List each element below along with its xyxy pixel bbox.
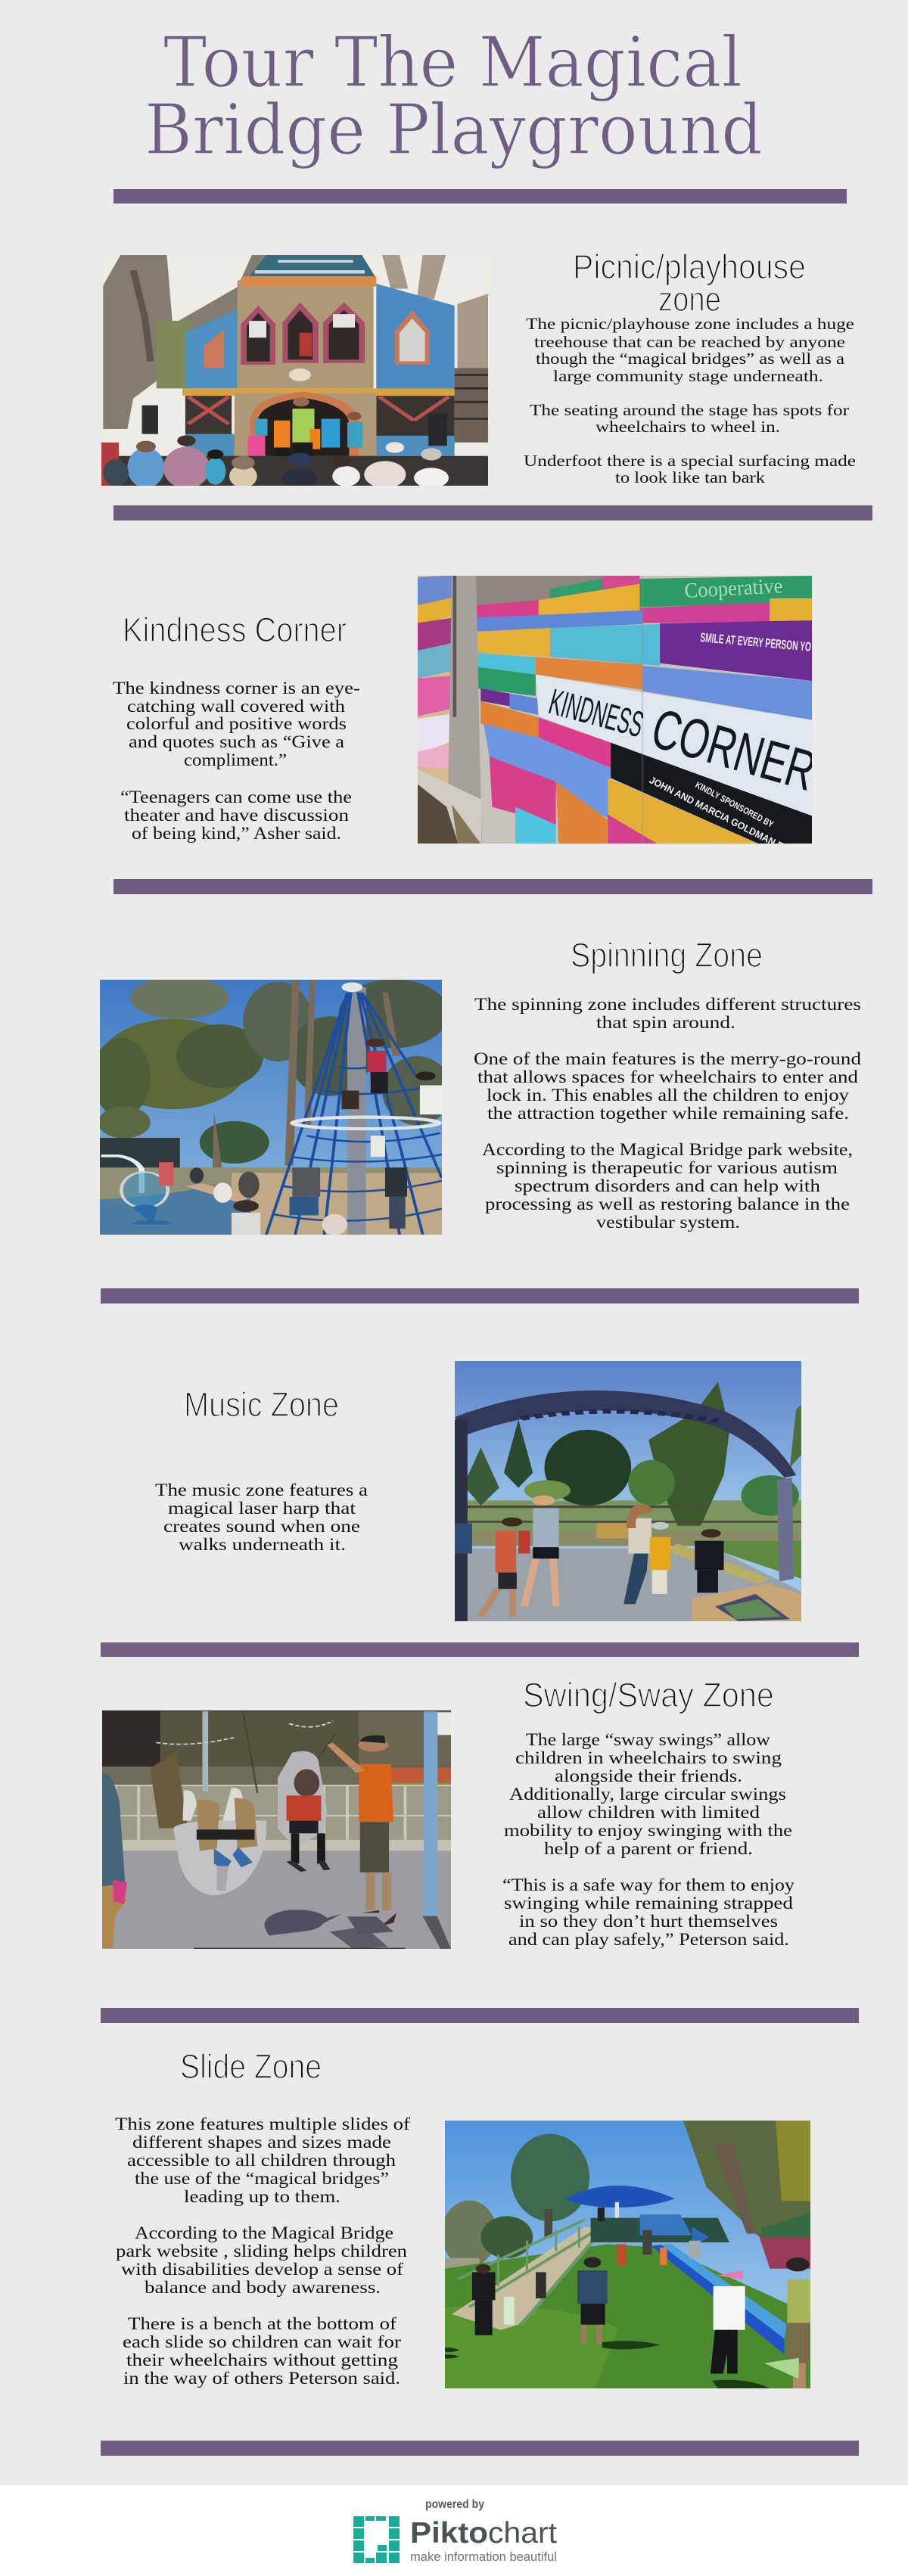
title: Tour The Magical xyxy=(163,22,742,103)
heading: slide zone: Slide Zone xyxy=(180,2047,322,2086)
text: picnic description xyxy=(524,315,856,486)
heading: picnic/playhouse zone xyxy=(573,247,806,319)
text: swing description: “This is a safe way for them to enjoy xyxy=(502,1875,795,1894)
text: slide description: different shapes and sizes made xyxy=(132,2133,391,2152)
heading: music zone: Music Zone xyxy=(184,1385,339,1424)
panel: picnic/playhouse zone xyxy=(101,247,856,489)
text: picnic description: to look like tan bark xyxy=(615,468,765,486)
text: swing description xyxy=(502,1730,795,1949)
text: slide description: each slide so children can wait for xyxy=(123,2332,401,2351)
audience xyxy=(101,435,488,489)
divider bar under title xyxy=(114,189,847,204)
heading: picnic/playhouse zone: zone xyxy=(658,280,721,319)
text: kindness description: and quotes such as “Give a xyxy=(129,732,344,751)
text: picnic description: treehouse that can be reached by anyone xyxy=(534,333,845,351)
divider bar xyxy=(114,505,872,520)
wall sign text: SMILE AT EVERY PERSON YO xyxy=(700,630,812,654)
text: swing description: mobility to enjoy swinging with the xyxy=(504,1821,792,1840)
wordmark: piktochart: chart xyxy=(488,2517,557,2550)
text: slide description: in the way of others Peterson said. xyxy=(123,2369,400,2388)
text: picnic description: The picnic/playhouse zone includes a huge xyxy=(526,315,854,333)
text: spinning description: processing as well as restoring balance in the xyxy=(485,1195,850,1213)
performers xyxy=(248,397,362,468)
text: picnic description: The seating around the stage has spots for xyxy=(530,401,849,419)
panel: music zone xyxy=(155,1361,802,1621)
text: kindness description xyxy=(113,679,360,843)
text: kindness description: compliment.” xyxy=(184,750,287,769)
text: spinning description: One of the main features is the merry-go-round xyxy=(474,1049,862,1068)
text: kindness description: colorful and positive words xyxy=(126,714,347,733)
tagline: make information beautiful xyxy=(410,2550,557,2564)
text: music description: magical laser harp that xyxy=(168,1499,356,1518)
photo: kindness wall xyxy=(418,576,812,844)
text: music description: creates sound when one xyxy=(163,1517,360,1536)
blue slide xyxy=(651,2244,785,2354)
title xyxy=(145,22,763,170)
text: slide description: balance and body awareness. xyxy=(145,2278,381,2297)
text: spinning description: spectrum disorders and can help with xyxy=(515,1176,821,1195)
text: slide description: According to the Magical Bridge xyxy=(135,2223,393,2242)
title: Bridge Playground xyxy=(145,89,763,170)
panel: kindness corner xyxy=(113,574,822,858)
text: slide description: their wheelchairs without getting xyxy=(126,2351,399,2369)
text: slide description: with disabilities develop a sense of xyxy=(121,2260,403,2279)
text: spinning description: The spinning zone includes different structures xyxy=(474,995,861,1014)
wall sign text: JOHN AND MARCIA GOLDMAN FOU xyxy=(648,774,798,858)
text: swing description: help of a parent or friend. xyxy=(544,1839,753,1858)
blue canopy xyxy=(564,2186,674,2226)
divider bar xyxy=(101,1288,859,1304)
heading: kindness corner: Kindness Corner xyxy=(123,611,347,649)
wordmark: piktochart: Pikto xyxy=(410,2517,488,2550)
text: swing description: children in wheelchairs to swing xyxy=(515,1748,782,1767)
people on the hill xyxy=(472,2208,810,2388)
divider bar xyxy=(114,879,872,894)
text: kindness description: The kindness corner is an eye- xyxy=(113,679,360,698)
text: slide description: the use of the “magical bridges” xyxy=(135,2169,389,2188)
text: swing description: alongside their friends. xyxy=(555,1767,742,1785)
photo: spinning climbing net xyxy=(100,980,442,1235)
text: slide description: This zone features multiple slides of xyxy=(115,2115,410,2133)
wall sign text: CORNER xyxy=(645,697,822,803)
text: swing description: and can play safely,” Peterson said. xyxy=(508,1930,789,1949)
text: slide description xyxy=(115,2115,410,2388)
man in orange xyxy=(327,1735,396,1925)
heading: spinning zone: Spinning Zone xyxy=(571,936,763,974)
text: picnic description: large community stage underneath. xyxy=(553,367,823,385)
text: slide description: accessible to all children through xyxy=(127,2151,396,2170)
wordmark: piktochart xyxy=(410,2517,557,2550)
text: picnic description: though the “magical bridges” as well as a xyxy=(536,350,845,368)
wall sign text: Cooperative xyxy=(684,574,783,603)
text: powered by: powered by xyxy=(425,2498,484,2511)
text: swing description: swinging while remaining strapped xyxy=(504,1894,794,1913)
text: spinning description: the attraction together while remaining safe. xyxy=(487,1104,849,1123)
text: picnic description: wheelchairs to wheel in. xyxy=(595,418,780,436)
panel: swing/sway zone xyxy=(102,1676,795,1949)
text: music description xyxy=(155,1481,368,1554)
panel: slide zone xyxy=(115,2047,810,2388)
text: kindness description: “Teenagers can come use the xyxy=(120,788,352,806)
text: music description: The music zone features a xyxy=(155,1481,368,1499)
text: spinning description: According to the Magical Bridge park website, xyxy=(482,1140,853,1159)
text: slide description: park website , sliding helps children xyxy=(116,2242,408,2261)
text: swing description: in so they don’t hurt themselves xyxy=(519,1912,778,1931)
photo: slide hill xyxy=(445,2121,810,2388)
children and adults xyxy=(455,1496,724,1617)
panel: spinning zone xyxy=(92,936,862,1235)
text: picnic description: Underfoot there is a special surfacing made xyxy=(524,452,856,470)
stairs and railings xyxy=(452,2220,605,2330)
text: slide description: leading up to them. xyxy=(184,2187,340,2206)
wall sign text: KINDLY SPONSORED BY xyxy=(694,779,776,830)
text: swing description: The large “sway swings” allow xyxy=(526,1730,770,1749)
text: spinning description: spinning is therapeutic for various autism xyxy=(496,1158,838,1177)
icon: piktochart logo xyxy=(353,2516,400,2563)
wall sign text: KINDNESS xyxy=(545,682,648,745)
text: swing description: Additionally, large circular swings xyxy=(509,1785,786,1804)
text: spinning description: lock in. This enables all the children to enjoy xyxy=(487,1086,850,1105)
photo: sway swings xyxy=(102,1711,451,1949)
wall sign text xyxy=(549,580,812,844)
text: slide description: There is a bench at the bottom of xyxy=(128,2314,396,2333)
heading: swing/sway zone: Swing/Sway Zone xyxy=(523,1676,774,1714)
text: spinning description xyxy=(474,995,862,1232)
divider bar xyxy=(101,2008,859,2023)
heading: picnic/playhouse zone: Picnic/playhouse xyxy=(573,247,806,286)
divider bar xyxy=(101,2441,859,2456)
text: music description: walks underneath it. xyxy=(179,1535,346,1554)
swing seat left xyxy=(173,1788,266,1895)
photo: treehouse stage xyxy=(101,255,488,486)
divider bar xyxy=(101,1642,859,1657)
swing seat right xyxy=(278,1751,327,1871)
photo: music arch xyxy=(455,1361,801,1621)
footer xyxy=(0,2485,908,2576)
text: spinning description: that allows spaces for wheelchairs to enter and xyxy=(477,1067,859,1086)
text: kindness description: catching wall covered with xyxy=(127,697,346,716)
text: swing description: allow children with limited xyxy=(537,1803,760,1822)
text: spinning description: that spin around. xyxy=(596,1013,735,1032)
text: kindness description: of being kind,” Asher said. xyxy=(132,824,341,843)
text: kindness description: theater and have discussion xyxy=(124,806,350,825)
text: spinning description: vestibular system. xyxy=(596,1213,740,1232)
